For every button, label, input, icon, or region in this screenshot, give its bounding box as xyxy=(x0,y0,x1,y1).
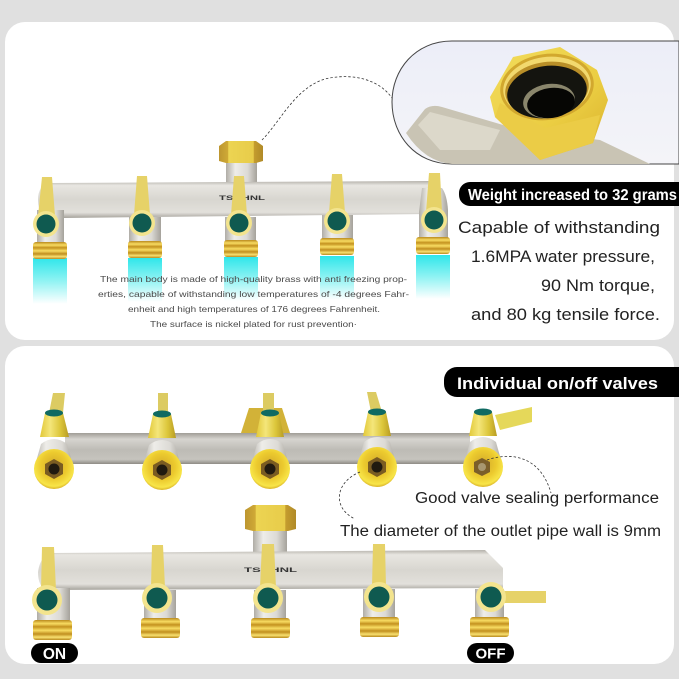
valve 2 xyxy=(128,176,162,258)
dashed leader to inset xyxy=(262,77,392,140)
valve 4 xyxy=(320,174,354,255)
pipe xyxy=(65,433,470,464)
valve 1 xyxy=(33,177,67,259)
paragraph: material description: The main body is made of high-quality brass with anti freezing prop- xyxy=(100,274,407,284)
valve 1 xyxy=(34,393,74,489)
label: ON xyxy=(31,643,78,663)
brass nut xyxy=(490,47,608,160)
paragraph: material description xyxy=(98,274,409,329)
panel: bottom card xyxy=(5,346,674,664)
header pill: weight xyxy=(459,182,679,206)
valve 4 on xyxy=(360,544,399,637)
label: OFF: OFF xyxy=(476,646,506,662)
back nut behind valve 3 xyxy=(241,408,290,433)
lower manifold, on and off valves xyxy=(32,505,546,640)
spec text: and 80 kg tensile force. xyxy=(471,305,660,324)
valve 2 on xyxy=(141,545,180,638)
paragraph: material description: enheit and high temperatures of 176 degrees Fahrenheit. xyxy=(128,304,380,314)
main pipe xyxy=(38,181,430,218)
upper manifold, outlet view xyxy=(34,392,532,490)
top inlet nut xyxy=(245,505,296,556)
brand text: TSCHNL xyxy=(244,567,297,574)
spec text: 90 Nm torque, xyxy=(541,276,655,295)
silver pipe in inset xyxy=(406,106,650,164)
main pipe with elbow xyxy=(38,550,503,590)
valve 3 on xyxy=(251,544,290,638)
panel: top card xyxy=(5,22,674,340)
label: ON: ON xyxy=(43,646,66,663)
header pill: valves: Individual on/off valves xyxy=(457,374,658,393)
header pill: valves xyxy=(444,367,679,397)
valve 5 off xyxy=(470,582,546,637)
spec text: Capable of withstanding xyxy=(458,218,660,237)
cyan water streams xyxy=(33,255,450,304)
callout: pipe wall leader xyxy=(339,472,360,519)
brand text: TSCHNL xyxy=(219,196,266,202)
valve 3 xyxy=(224,176,258,257)
top inlet nut xyxy=(219,141,263,186)
spec text xyxy=(458,218,660,324)
paragraph: material description: erties, capable of withstanding low temperatures of -4 degrees Fahr- xyxy=(98,289,409,299)
spec text: 1.6MPA water pressure, xyxy=(471,247,655,266)
upper manifold, side view xyxy=(33,141,450,259)
inset: nut close-up xyxy=(392,41,679,164)
valve 5, off handle xyxy=(463,407,532,487)
paragraph: material description: The surface is nickel plated for rust prevention· xyxy=(150,319,357,329)
valve 2 xyxy=(142,393,182,490)
callout: valve sealing leader xyxy=(487,456,551,493)
valve 3 xyxy=(250,393,290,489)
text: sealing: Good valve sealing performance xyxy=(415,490,659,507)
valve 5 xyxy=(416,173,450,254)
label: OFF xyxy=(467,643,514,663)
valve 1 on xyxy=(32,547,72,640)
valve 4 xyxy=(357,392,397,487)
text: pipe wall: The diameter of the outlet pipe wall is 9mm xyxy=(340,523,661,540)
